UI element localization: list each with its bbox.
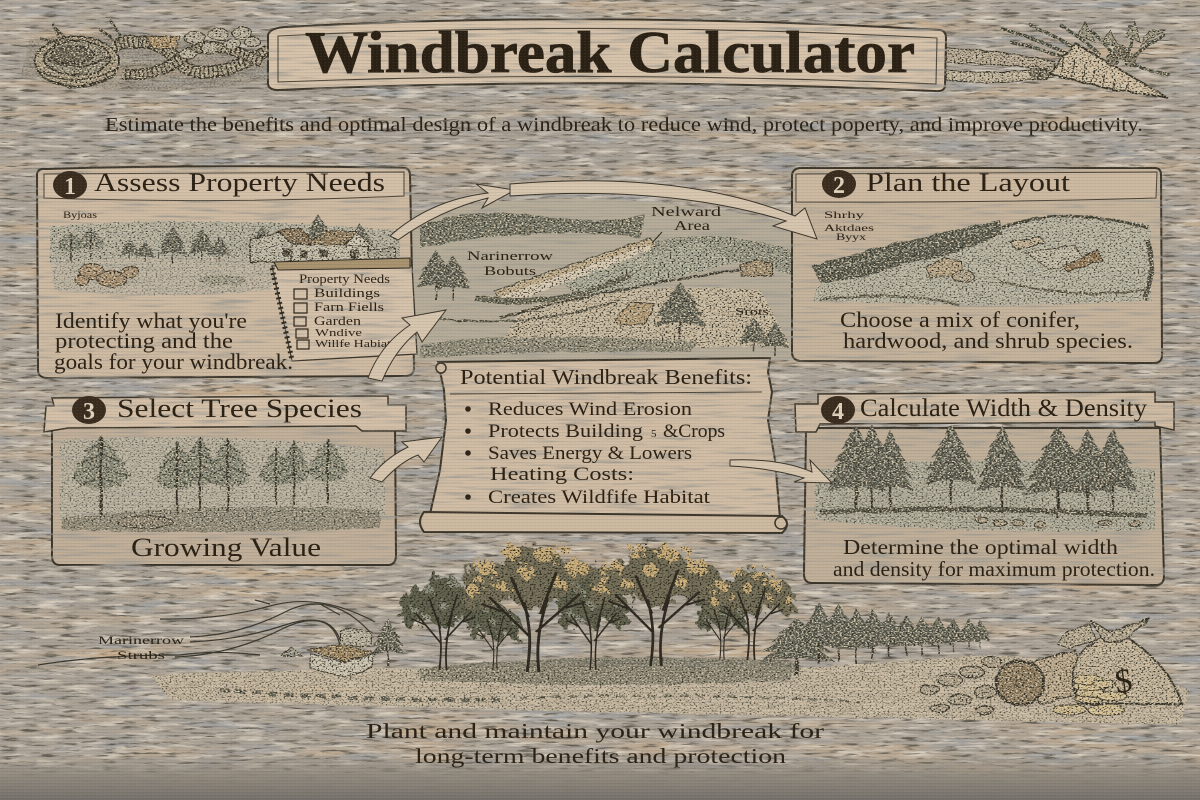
- barn: [741, 259, 773, 276]
- caption: Growing Value: [131, 533, 321, 562]
- number badge: [53, 171, 87, 200]
- farmstead: [282, 628, 375, 677]
- sketch label: Byjoas: [63, 210, 98, 220]
- wind label: Marinerrow: [98, 635, 185, 647]
- benefits list: &Crops: [663, 422, 725, 442]
- center landscape map: [412, 199, 800, 362]
- map label: spots: Srots: [735, 306, 769, 318]
- ribbon header: [44, 396, 406, 432]
- number badge: 3: [83, 399, 95, 425]
- map label: wooded strip: Bobuts: [484, 264, 536, 278]
- map label: leeward area: Area: [674, 218, 710, 233]
- benefits list: Heating Costs:: [490, 465, 634, 485]
- sketch labels: Aktdaes: [824, 224, 874, 234]
- body text: Determine the optimal width: [843, 535, 1119, 559]
- benefits list: 5: [651, 428, 657, 440]
- body text: [54, 308, 293, 374]
- ribbon header: [795, 392, 1174, 432]
- body text: Choose a mix of conifer,: [840, 307, 1080, 332]
- panel 1: assess property needs: [37, 166, 417, 378]
- bottom illustration: broadleaf foliage: [401, 545, 795, 639]
- checklist note: Buildings: [314, 286, 380, 300]
- heading: Assess Property Needs: [94, 168, 385, 197]
- scroll bottom roll: [420, 512, 787, 533]
- bottom illustration: conifers, farm, money: [282, 602, 1182, 716]
- cottage: [615, 302, 655, 325]
- body text: protecting and the: [55, 328, 233, 353]
- map label: wooded strip: [467, 249, 553, 278]
- map label: leeward area: [651, 204, 721, 243]
- checklist note: Willfe Habiat: [315, 338, 391, 350]
- number badge: [822, 170, 856, 199]
- heading: Select Tree Species: [117, 394, 362, 423]
- arrow: step 1 to map: [390, 184, 515, 240]
- distant tree line: [420, 213, 645, 248]
- number badge: [72, 396, 106, 425]
- title banner: [268, 19, 946, 91]
- closing message: [366, 719, 824, 768]
- wind label: Strubs: [117, 650, 166, 662]
- sketch labels: Byyx: [836, 233, 866, 243]
- number badge: 4: [832, 399, 844, 425]
- body text: [833, 535, 1155, 581]
- body text: [840, 307, 1133, 353]
- log, coins and money bag: [996, 618, 1182, 716]
- benefits list: Saves Energy & Lowers: [488, 444, 692, 464]
- header band: [44, 172, 404, 201]
- checklist note: Wndive: [315, 327, 362, 339]
- windbreak strip: [494, 238, 655, 298]
- map label: wooded strip: Narinerrow: [467, 249, 553, 263]
- illustration: windbreak layout: [812, 216, 1152, 305]
- wind lines: [38, 600, 375, 665]
- number badge: [821, 396, 855, 425]
- heading: Plan the Layout: [866, 168, 1071, 197]
- number badge: 2: [833, 173, 845, 199]
- map label: leeward area: Nelward: [651, 204, 721, 219]
- header band: [796, 172, 1157, 202]
- corner illustration: carrot and greens: [946, 22, 1170, 98]
- illustration: young trees: [60, 436, 385, 532]
- scroll: potential windbreak benefits: [420, 358, 787, 533]
- corner illustration: rope and stones: [20, 20, 280, 92]
- sketch labels: Shrhy: [824, 211, 864, 221]
- arrow: benefits to step 4: [730, 460, 832, 483]
- subtitle: Estimate the benefits and optimal design of a windbreak to reduce wind, protect poperty, and improve productivity.: [105, 114, 1143, 136]
- body text: hardwood, and shrub species.: [843, 328, 1133, 353]
- number badge: 1: [64, 174, 76, 200]
- benefits list: Reduces Wind Erosion: [488, 400, 692, 420]
- checklist note: Property Needs: [299, 272, 390, 286]
- closing message: long-term benefits and protection: [415, 744, 786, 768]
- checklist note: [272, 258, 417, 361]
- panel 3: select tree species: [44, 394, 406, 565]
- conifer row: [758, 618, 836, 676]
- wind label: [98, 635, 185, 662]
- panel 2: plan the layout: [792, 168, 1162, 363]
- panel body: [804, 428, 1164, 585]
- sketch labels: [824, 211, 874, 243]
- panel 4: calculate width and density: [795, 392, 1174, 585]
- arrow: step 3 to benefits: [370, 437, 442, 482]
- scroll paper: [430, 358, 780, 518]
- body text: and density for maximum protection.: [833, 557, 1155, 581]
- title text: Windbreak Calculator: [305, 19, 915, 85]
- panel body: [37, 166, 414, 378]
- bottom illustration: tree trunks: [412, 571, 783, 672]
- bottom illustration: ground: [150, 655, 1190, 725]
- heading: Calculate Width & Density: [860, 395, 1148, 422]
- checklist note: Farn Fiells: [314, 300, 384, 314]
- large pine: [652, 282, 708, 340]
- closing message: Plant and maintain your windbreak for: [366, 719, 824, 743]
- benefits list: Protects Building: [488, 422, 643, 442]
- benefits list: [465, 400, 725, 508]
- arrow: step 1 to map lower: [368, 310, 446, 381]
- illustration: mature conifers: [815, 424, 1155, 531]
- benefits list: Creates Wildfife Habitat: [488, 488, 711, 508]
- panel body: [52, 425, 396, 565]
- checklist note: Garden: [314, 314, 362, 328]
- body text: goals for your windbreak.: [54, 349, 293, 374]
- arrow: map to step 2: [510, 181, 817, 239]
- left tree cluster: [416, 250, 456, 300]
- panel body: [792, 168, 1162, 363]
- body text: Identify what you're: [55, 308, 247, 333]
- stone pile: [920, 657, 1002, 714]
- illustration: farmhouse: [50, 214, 400, 295]
- scroll title: Potential Windbreak Benefits:: [460, 365, 752, 389]
- dollar sign on bag: $: [1113, 662, 1135, 701]
